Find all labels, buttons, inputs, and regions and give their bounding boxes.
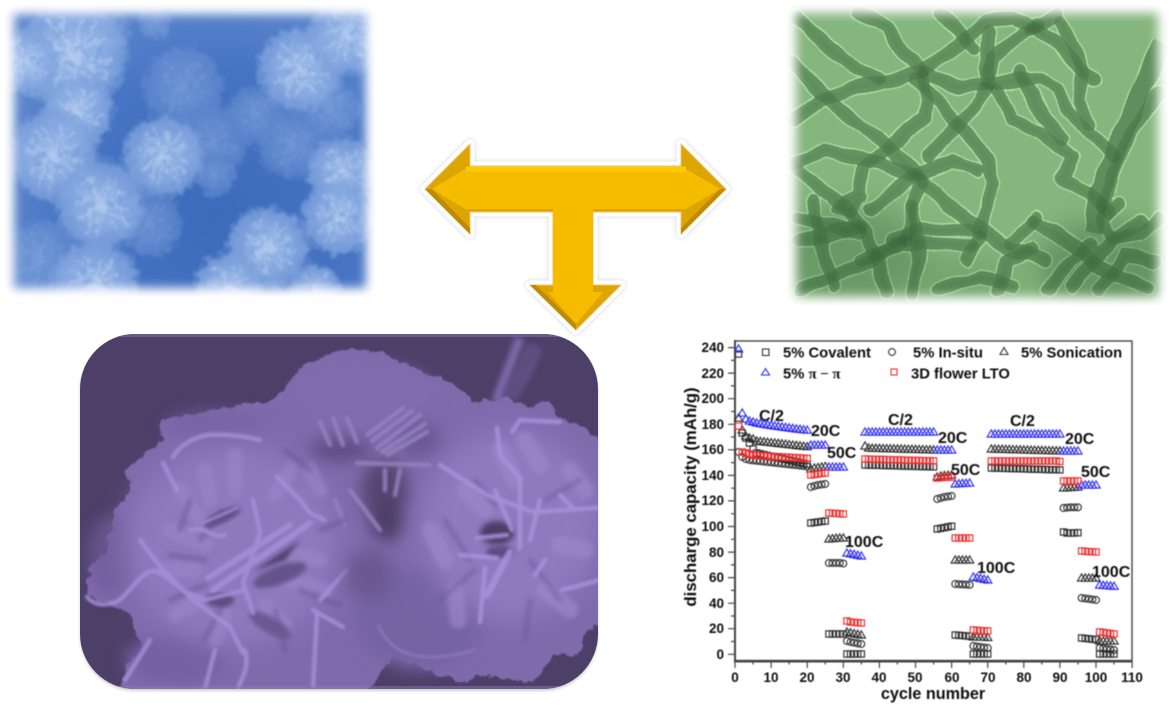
legend: 5% Sonication [1021,346,1122,362]
image: purple flower microscopy panel [80,334,605,695]
series: 3D flower LTO squares [739,426,1114,634]
image: green nanotube microscopy panel [775,5,1174,310]
series: 5% Sonication triangles [739,418,1114,641]
arrow: three-way gold T arrow [425,144,726,330]
x axis tick labels: 20 [799,670,815,685]
x axis tick labels: 0 [731,670,739,685]
left flower nanotubes [87,435,347,689]
wide tube on the right [1093,45,1162,233]
rate labels [759,408,1131,581]
y axis tick labels: 0 [716,647,724,662]
x axis tick labels: 60 [944,670,960,685]
y axis tick labels: 80 [709,545,724,560]
rate labels: 20C [811,423,841,440]
x axis tick labels: 40 [871,670,887,685]
y axis tick labels: 40 [709,596,724,611]
x axis title: cycle number [881,685,986,703]
bottom central texture [362,576,476,678]
flower cluster silhouette [87,350,605,695]
x axis tick labels: 100 [1085,670,1107,685]
rate labels: 50C [827,445,857,462]
rate labels: C/2 [1010,413,1035,430]
x axis tick labels: 70 [980,670,996,685]
y axis tick labels: 220 [701,366,724,381]
x axis tick labels: 80 [1016,670,1032,685]
y axis tick labels: 120 [701,493,724,508]
plot frame and axes [728,340,1132,668]
y axis tick labels: 160 [701,442,724,457]
rate labels: 50C [951,462,981,479]
foreground flowers [9,9,371,294]
rate labels: 100C [1092,564,1131,581]
x axis tick labels: 10 [763,670,779,685]
rate labels: 20C [938,430,968,447]
left flower dark gaps [252,540,300,572]
y axis tick labels: 20 [709,621,724,636]
y axis tick labels: 240 [701,340,724,355]
x axis tick labels: 90 [1052,670,1068,685]
series: 5% pi-pi triangles [739,349,1114,586]
legend: 5% Covalent [783,346,871,362]
rate labels: 100C [845,534,884,551]
legend: 5% In-situ [913,346,983,362]
rate labels: C/2 [888,412,913,429]
legend [762,346,1122,382]
rate labels: 100C [977,560,1016,577]
rate labels: 50C [1081,464,1111,481]
legend: 3D flower LTO [911,366,1010,382]
y axis tick labels: 200 [701,391,724,406]
chart: discharge capacity vs cycle number [681,340,1143,703]
central flower shading [398,360,432,376]
right flower [422,430,598,620]
series: 5% Covalent squares [739,354,1114,654]
x axis tick labels: 110 [1121,670,1143,685]
x axis tick labels: 50 [907,670,923,685]
faint background flowers [14,12,361,288]
legend: 5% π − π [783,366,841,382]
y axis tick labels: 60 [709,570,724,585]
x axis tick labels: 30 [835,670,851,685]
outer petal shade [82,512,126,592]
dense dark tangle shading [775,205,925,305]
y axis tick labels: 180 [701,417,724,432]
left flower petals [127,445,337,645]
x axis tick labels [731,670,1143,685]
rate labels: 20C [1065,431,1095,448]
wisp [496,338,520,402]
y axis tick labels: 140 [701,468,724,483]
y axis title: discharge capacity (mAh/g) [681,387,700,607]
series: 5% In-situ circles [739,452,1114,650]
y axis tick labels: 100 [701,519,724,534]
rate labels: C/2 [759,408,784,425]
image: blue flower microscopy panel [6,6,374,296]
y axis tick labels [701,340,724,662]
